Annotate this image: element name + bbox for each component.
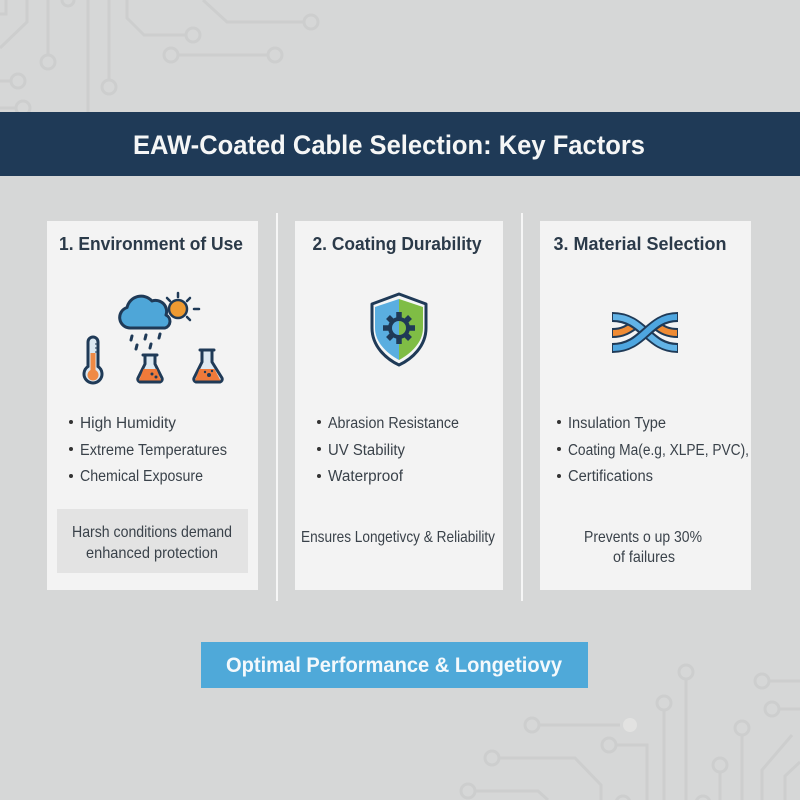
note: Ensures Longetivcy & Reliability — [301, 529, 495, 546]
callout — [57, 509, 248, 573]
panel: environment of use — [47, 221, 258, 590]
conclusion banner: Optimal Performance & Longetiovy — [226, 654, 562, 677]
bullet list — [317, 415, 459, 485]
conclusion banner — [201, 642, 588, 688]
icon: twisted cables — [612, 317, 678, 348]
icon: cloud with sun and rain — [120, 293, 199, 349]
callout: Harsh conditions demand — [72, 524, 232, 541]
heading: material selection: 3. Material Selection — [554, 234, 726, 254]
icon: flask large — [194, 350, 222, 382]
callout: enhanced protection — [86, 545, 218, 562]
panel: material selection — [540, 221, 751, 590]
panel: coating durability — [295, 221, 503, 590]
title: EAW-Coated Cable Selection: Key Factors — [133, 130, 645, 160]
heading: coating durability: 2. Coating Durability — [312, 234, 482, 254]
bullet list — [69, 415, 227, 485]
icon: flask — [138, 355, 162, 382]
bullet list: Abrasion Resistance — [328, 415, 459, 432]
bullet list: Insulation Type — [568, 415, 666, 432]
note: of failures — [613, 549, 675, 566]
bullet list: Extreme Temperatures — [80, 442, 227, 459]
heading: environment of use: 1. Environment of Use — [59, 234, 243, 254]
bullet list: Certifications — [568, 468, 653, 485]
icon: shield with gear — [372, 294, 426, 365]
bullet list: UV Stability — [328, 442, 405, 459]
bullet list: Coating Ma(e.g, XLPE, PVC), — [568, 442, 749, 459]
bullet list: Waterproof — [328, 468, 404, 485]
bullet list: Chemical Exposure — [80, 468, 203, 485]
note — [584, 529, 702, 566]
icon: thermometer — [84, 337, 102, 383]
note: Prevents o up 30% — [584, 529, 702, 546]
bullet list — [557, 415, 749, 485]
title banner — [0, 112, 800, 176]
bullet list: High Humidity — [80, 415, 176, 432]
